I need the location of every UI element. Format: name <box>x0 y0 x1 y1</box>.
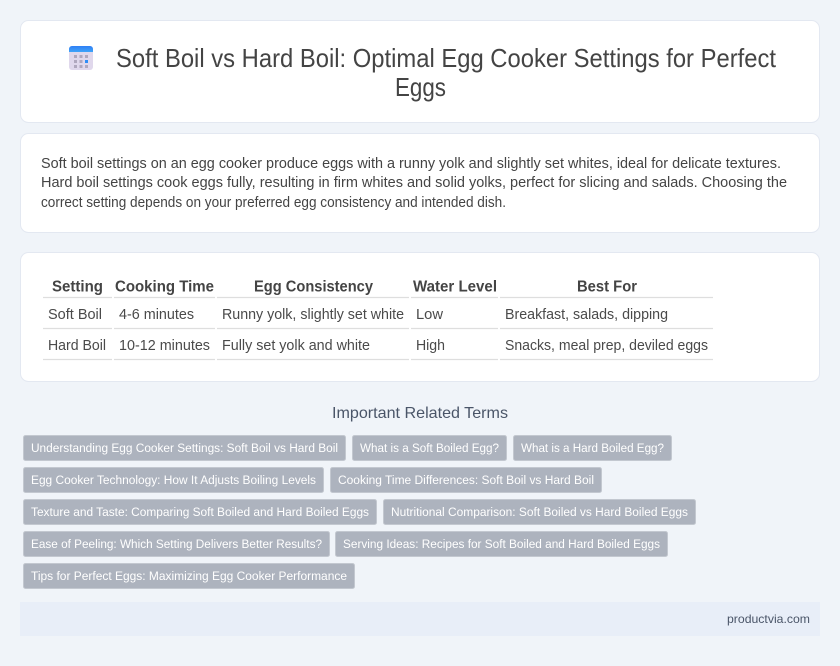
title: Soft Boil vs Hard Boil: Optimal Egg Cooker Settings for Perfect <box>116 45 776 73</box>
table row: hard boil: High <box>416 338 445 354</box>
tag: Serving Ideas: Recipes for Soft Boiled and Hard Boiled Eggs <box>343 537 660 551</box>
related terms tags <box>24 436 696 588</box>
title <box>116 45 776 102</box>
tag: Ease of Peeling: Which Setting Delivers Better Results? <box>31 537 322 551</box>
table row: hard boil: Fully set yolk and white <box>222 338 370 354</box>
table header: Setting <box>52 278 103 296</box>
table row: hard boil: 10-12 minutes <box>119 338 210 354</box>
footer: productvia.com <box>727 612 810 626</box>
tag <box>24 436 346 460</box>
tag: Cooking Time Differences: Soft Boil vs Hard Boil <box>338 473 594 487</box>
table header: Best For <box>577 278 637 296</box>
text block: summary: correct setting depends on your preferred egg consistency and intended dish. <box>41 195 506 211</box>
table header: Water Level <box>413 278 497 296</box>
table row: soft boil: Breakfast, salads, dipping <box>505 307 668 323</box>
table row: soft boil: 4-6 minutes <box>119 307 194 323</box>
tag: Understanding Egg Cooker Settings: Soft Boil vs Hard Boil <box>31 441 338 455</box>
table row: soft boil: Runny yolk, slightly set white <box>222 307 404 323</box>
tag <box>24 532 330 556</box>
icon: calendar grid <box>69 46 93 70</box>
text block: summary: Soft boil settings on an egg cooker produce eggs with a runny yolk and slightly set whites, ideal for delicate textures. <box>41 156 781 172</box>
heading: important related terms: Important Related Terms <box>332 405 508 422</box>
tag <box>24 500 376 524</box>
tag: Nutritional Comparison: Soft Boiled vs Hard Boiled Eggs <box>391 505 688 519</box>
text block: summary <box>41 156 787 211</box>
tag <box>352 436 506 460</box>
text block: summary: Hard boil settings cook eggs fully, resulting in firm whites and solid yolks, perfect for slicing and salads. Choosing the <box>41 175 787 191</box>
table row: hard boil: Snacks, meal prep, deviled eggs <box>505 338 708 354</box>
tag: Tips for Perfect Eggs: Maximizing Egg Cooker Performance <box>31 569 347 583</box>
panel: summary text <box>20 134 820 232</box>
table row: soft boil <box>48 307 668 323</box>
table header <box>52 278 637 296</box>
tag: Texture and Taste: Comparing Soft Boiled and Hard Boiled Eggs <box>31 505 369 519</box>
panel: comparison table <box>20 252 820 382</box>
title: Eggs <box>395 74 446 102</box>
table header: Cooking Time <box>115 278 214 296</box>
panel: title card <box>20 20 820 122</box>
table header: Egg Consistency <box>254 278 373 296</box>
table row: soft boil: Low <box>416 307 444 323</box>
tag: What is a Soft Boiled Egg? <box>360 441 499 455</box>
table row: soft boil: Soft Boil <box>48 307 102 323</box>
tag <box>330 468 602 492</box>
footer <box>20 602 820 636</box>
tag <box>514 436 672 460</box>
tag <box>24 564 354 588</box>
table row: hard boil: Hard Boil <box>48 338 106 354</box>
tag: Egg Cooker Technology: How It Adjusts Boiling Levels <box>31 473 316 487</box>
tag <box>24 468 324 492</box>
tag <box>384 500 696 524</box>
table row: hard boil <box>48 338 708 354</box>
tag: What is a Hard Boiled Egg? <box>521 441 664 455</box>
tag <box>336 532 668 556</box>
